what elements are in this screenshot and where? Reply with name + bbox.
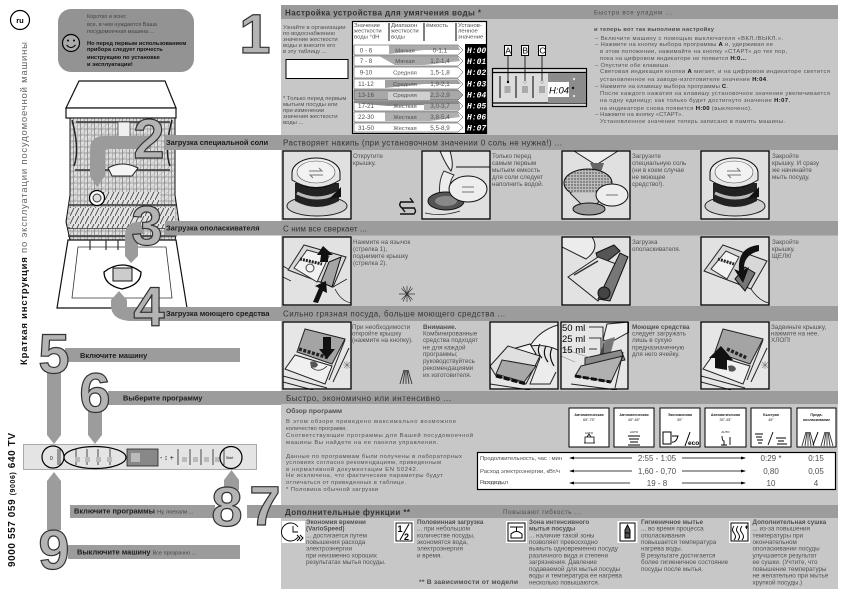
function: extra drying: ее сушки. (Учтите, что xyxy=(752,559,818,566)
salt step 2: fill with water: мытьем емкость xyxy=(492,167,541,174)
function: hygiene: В результате достигается xyxy=(641,552,715,560)
attention note on combined detergents: программы; xyxy=(423,351,458,358)
detergent step 3: dosage: следует загружать xyxy=(632,330,687,338)
program cards: 65°-75° xyxy=(583,418,596,422)
function: intensive zone: воды и температура ее нагрева xyxy=(529,572,622,580)
text block: setup instructions: пока на цифровом индикаторе не появится H:0... xyxy=(600,56,746,62)
model footnote: ** В зависимости от модели xyxy=(419,579,518,586)
program cards: Автоматическая xyxy=(574,413,604,417)
salt step 3: load salt: (ни в коем случае xyxy=(632,167,685,174)
detergent step 1: open lid: (нажмите на кнопку). xyxy=(352,337,413,344)
rinse step 1: press latch: поднимите крышку xyxy=(353,253,409,260)
water hardness table: 7 - 8 xyxy=(360,58,373,65)
water hardness table: 31-50 xyxy=(358,125,375,132)
callout: read the manual: инструкцию по установке xyxy=(87,55,160,61)
function: intensive zone: ... наличие такой зоны xyxy=(529,532,595,540)
function: hygiene xyxy=(618,519,729,573)
water hardness table: Жесткая xyxy=(393,104,417,110)
salt step 4: close lid: же начинайте xyxy=(772,166,812,174)
program data table: 0,05 xyxy=(808,467,824,476)
program overview text: условиях согласно рекомендациям, приведенным xyxy=(286,460,441,466)
program cards: Экономичная xyxy=(668,413,692,417)
step 6: select program xyxy=(79,361,281,444)
text block: find out the water hardness: значение жесткости xyxy=(283,37,338,43)
water hardness table: Мягкая xyxy=(395,59,415,65)
program data table: 2:55 - 1:05 xyxy=(638,454,677,463)
function: VarioSpeed: электроэнергии xyxy=(306,546,352,552)
callout: read the manual: посудомоечная машина ... xyxy=(87,29,155,35)
function: half load: и время. xyxy=(417,552,442,560)
function: hygiene: нагрева воды. xyxy=(641,546,683,552)
detergent step 3: dosage: 15 ml xyxy=(562,345,585,356)
attention note on combined detergents: Внимание. xyxy=(423,324,456,331)
rinse step 3: close lid: ЩЕЛК! xyxy=(772,253,792,260)
text block: setup instructions: – Нажмите на клавишу выбора программы C. xyxy=(595,84,728,90)
program cards: Быстрая xyxy=(763,413,779,417)
program data table: 0:15 xyxy=(808,454,824,463)
control panel with A B C buttons: B xyxy=(522,46,528,56)
detergent step 1: open lid: откройте крышку xyxy=(352,330,402,338)
water hardness table: 0-1,1 xyxy=(433,48,448,54)
program cards: 50° xyxy=(677,418,683,422)
section band: water softener setup xyxy=(281,5,838,19)
water hardness table: жесткости xyxy=(354,28,382,34)
text block: setup instructions: – Опустите обе клавиши. xyxy=(595,63,670,69)
salt step 2: fill with water: Только перед xyxy=(492,153,532,160)
water hardness table: 3,8-5,4 xyxy=(430,114,450,121)
rinse step 2: load rinse aid: ополаскивателя. xyxy=(632,246,681,253)
section band: salt xyxy=(281,135,838,150)
section band: water softener setup: Быстро все уладим ... xyxy=(594,10,672,16)
water hardness table: Средняя xyxy=(393,70,417,76)
water hardness table: H:07 xyxy=(467,124,486,134)
callout: read the manual: Коротко и ясно: xyxy=(87,14,127,20)
control panel with A B C buttons: A xyxy=(505,46,511,56)
text block: setup instructions: После каждого нажатия на клавишу установочное значение увеличивается xyxy=(600,91,830,97)
program overview text: * Половина обычной загрузки xyxy=(286,486,378,493)
program overview text: отличаться от приведенных в таблице. xyxy=(286,480,406,486)
function: half load xyxy=(394,519,484,560)
function: extra drying: Дополнительная сушка xyxy=(752,519,827,526)
water hardness table: 0 - 6 xyxy=(360,48,373,54)
section band: additional functions xyxy=(281,505,838,518)
water hardness table: H:00 xyxy=(467,47,486,56)
function: hygiene: посуды после мытья. xyxy=(641,566,703,573)
function: extra drying: повышение температуры xyxy=(752,566,827,573)
program cards xyxy=(569,408,836,447)
text block: setup instructions: и теперь вот так выполним настройку xyxy=(594,26,715,33)
function: extra drying: хрупкой посуды.) xyxy=(752,578,802,586)
section band: detergent: Сильно грязная посуда, больше моющего средства ... xyxy=(283,310,505,318)
label: rinse aid xyxy=(165,221,281,236)
function: half load: 1 xyxy=(398,524,403,534)
section band: water softener setup: Настройка устройства для умягчения воды * xyxy=(285,8,482,18)
text block: find out the water hardness: в эту таблицу ... xyxy=(283,49,327,55)
attention note on combined detergents: рекомендациями xyxy=(423,365,474,372)
text block: find out the water hardness: по водоснабжению xyxy=(283,31,336,37)
function: VarioSpeed: ... достигается путем xyxy=(306,532,367,540)
program overview text: количество программ. xyxy=(286,426,347,432)
program overview text: Данные по программам были получены в лабораторных xyxy=(286,454,462,460)
salt step 3: load salt: не моющее xyxy=(632,174,666,181)
program overview text xyxy=(286,407,473,493)
detergent step 4: close lid xyxy=(701,322,826,390)
section band: rinse aid: С ним все сверкает ... xyxy=(283,224,367,234)
salt step 3: load salt: средство!). xyxy=(632,181,664,188)
rinse step 1: press latch xyxy=(283,237,411,305)
function: hygiene: более гигиеничное состояние xyxy=(641,558,729,566)
text block: setup instructions: – Нажмите на кнопку «СТАРТ». xyxy=(595,112,683,118)
function: intensive zone: несколько повышаются. xyxy=(529,580,600,586)
note: first use xyxy=(283,96,346,126)
arrow: step 2 to salt xyxy=(90,136,150,206)
water hardness table: воды xyxy=(391,34,405,40)
water hardness table: Диапазон xyxy=(391,23,417,29)
section band: rinse aid xyxy=(281,221,838,236)
note: first use: мытьем посуды или xyxy=(283,102,338,108)
note: first use: * Только перед первым xyxy=(283,96,346,102)
water hardness table: ленное xyxy=(458,28,478,34)
program data table: 1,60 - 0,70 xyxy=(638,467,677,476)
water hardness table: 1,2-1,4 xyxy=(430,58,450,65)
water hardness table: H:02 xyxy=(467,69,486,78)
function: VarioSpeed: Экономия времени xyxy=(306,519,366,526)
program overview text: Не исключена, что фактические параметры будут xyxy=(286,473,443,479)
program cards: Автоматическая xyxy=(619,413,649,417)
water hardness table: жесткости xyxy=(391,28,419,34)
step 9: switch off: Выключите машину Все прозрачно ... xyxy=(77,548,197,556)
program overview text: В этом обзоре приведено максимально возможное xyxy=(286,419,457,425)
rinse step 3: close lid xyxy=(701,237,799,305)
water hardness table: 1,5-1,8 xyxy=(430,70,450,76)
rinse step 1: press latch: Нажмите на язычок xyxy=(353,239,411,246)
function: VarioSpeed: при неизменно хороших xyxy=(306,552,378,560)
water hardness table: 22-30 xyxy=(358,114,375,121)
program overview text: Обзор программ xyxy=(286,407,342,415)
text block: setup instructions: установленное на заводе-изготовителе значение H:04. xyxy=(600,77,768,83)
program cards: 45°-65° xyxy=(628,418,641,422)
function: hygiene: ополаскивания xyxy=(641,532,685,540)
water hardness table: H:04 xyxy=(467,92,486,100)
water hardness table: 2,2-2,9 xyxy=(430,92,450,99)
program data table: Продолжительность, час : мин xyxy=(480,456,562,462)
water hardness table: H:01 xyxy=(467,58,486,67)
water hardness table: Мягкая xyxy=(395,48,415,54)
rinse step 3: close lid: Закройте xyxy=(772,238,799,246)
water hardness table: Значение xyxy=(354,23,381,29)
salt step 3: load salt: Загрузите xyxy=(632,153,661,160)
badge: language ru xyxy=(10,10,30,30)
callout: read the manual: Но перед первым использованием xyxy=(87,41,186,47)
step 7 number and band: 7 xyxy=(249,474,281,537)
function: extra drying: ... из-за повышения xyxy=(752,526,810,532)
control strip: - ↕ + xyxy=(160,455,174,462)
water hardness table: H:06 xyxy=(467,114,486,122)
section band: salt: Растворяет накипь (при установочном значении 0 соль не нужна!) ... xyxy=(283,138,562,148)
step 8: start program: Включите программы Ну, поехали ... xyxy=(74,506,194,516)
program data table: 0,80 xyxy=(763,467,779,476)
step 3 number: 3 xyxy=(131,194,163,257)
text block: setup instructions: – Включите машину с помощью выключателя «ВКЛ./ВЫКЛ.». xyxy=(595,36,783,42)
salt step 3: load salt: специальную соль xyxy=(632,160,687,167)
program cards: Предв. xyxy=(810,413,823,417)
function: intensive zone: Зона интенсивного xyxy=(529,519,589,526)
vertical title: Краткая инструкция по эксплуатации посудомоечной машины xyxy=(19,42,30,365)
detergent step 3: dosage: 50 ml xyxy=(562,323,585,334)
water hardness table: Средняя xyxy=(393,93,417,99)
function: hygiene: повышается температура xyxy=(641,539,717,546)
text block: find out the water hardness: воды и внесите его xyxy=(283,43,336,49)
detergent step 3: dosage: 25 ml xyxy=(562,334,585,345)
step 2 number: 2 xyxy=(133,107,165,170)
detergent step 3: dosage xyxy=(561,322,690,390)
program data table: 19 - 8 xyxy=(647,479,668,488)
function: extra drying: ополаскивании посуды xyxy=(752,546,820,552)
text block: setup instructions xyxy=(594,26,830,125)
text block: setup instructions: Световая индикация кнопки A мигает, и на цифровом индикаторе светится xyxy=(600,69,830,75)
salt step 4: close lid: мыть посуду. xyxy=(772,174,810,181)
salt step 2: fill with water: наполнить водой. xyxy=(492,180,544,188)
program overview text: в нормативной документации EN 50242. xyxy=(286,466,418,473)
salt step 1: open lid: Открутите xyxy=(353,153,383,160)
function: extra drying: окончательном xyxy=(752,539,797,546)
text block: setup instructions: Установленное значение теперь записано в память машины. xyxy=(600,119,785,125)
water hardness table: 3,0-3,7 xyxy=(430,103,450,110)
step 5: switch on: Включите машину xyxy=(80,351,148,360)
function: intensive zone: подаваемой для мытья посуды xyxy=(529,565,621,573)
program data table: Расход электроэнергии, кВт/ч xyxy=(480,469,560,475)
control strip: 0 xyxy=(50,456,53,462)
water hardness table: 13-16 xyxy=(358,92,375,99)
water hardness table: 11-12 xyxy=(358,81,374,88)
detergent step 3: dosage: для него ячейку. xyxy=(632,350,680,358)
text block: setup instructions: на одну единицу; как только будет достигнуто значение H:07, xyxy=(600,98,790,104)
water hardness table: значение xyxy=(458,34,484,40)
water hardness table xyxy=(352,22,486,134)
rinse step 2: load rinse aid xyxy=(562,237,681,305)
salt step 4: close lid: крышку. И сразу xyxy=(772,160,820,167)
program cards: 35°-45° xyxy=(719,418,732,422)
water hardness table: Жесткая xyxy=(393,126,417,132)
right panel background xyxy=(281,5,838,589)
step 9: switch off xyxy=(38,472,240,581)
function: half load: 2 xyxy=(404,532,409,542)
attention note on combined detergents: руководствуйтесь xyxy=(423,357,476,365)
section band: additional functions: Повышают гибкость ... xyxy=(503,508,581,516)
water hardness table: 9-10 xyxy=(360,70,373,76)
function: half load: электроэнергия xyxy=(417,546,463,552)
water hardness table: Жесткая xyxy=(393,115,417,121)
rinse step 1: press latch: (стрелка 1), xyxy=(353,246,387,253)
program data table: 4 xyxy=(814,479,819,488)
attention note on combined detergents: Комбинированные xyxy=(423,330,478,338)
program cards: AUTO xyxy=(721,430,730,434)
detergent step 1: open lid: При необходимости xyxy=(352,323,411,331)
label: salt: Загрузка специальной соли xyxy=(166,138,269,147)
program data table: 0:29 * xyxy=(761,454,781,463)
step 5: switch on xyxy=(38,322,240,444)
note: first use: воды ... xyxy=(283,120,304,126)
water hardness table: ёмкость xyxy=(426,23,448,29)
text block: setup instructions: в этом положении, нажимайте на кнопку «СТАРТ» до тех пор, xyxy=(600,48,787,55)
control panel with A B C buttons: H:04 xyxy=(549,86,569,96)
callout: read the manual: прибора следует прочесть xyxy=(87,46,163,53)
function: intensive zone xyxy=(506,519,622,586)
function: half load: Половинная загрузка xyxy=(417,519,484,526)
step 4 number: 4 xyxy=(133,275,165,338)
arrow: step 4 to detergent xyxy=(111,291,281,321)
text block: setup instructions: на индикаторе снова появится H:00 (выключено). xyxy=(600,106,752,112)
salt step 3: load salt xyxy=(562,151,687,219)
function: VarioSpeed xyxy=(282,519,386,566)
attention note on combined detergents xyxy=(423,324,478,379)
water hardness table: воды °dH xyxy=(354,34,379,40)
detergent step 1: open lid xyxy=(283,322,413,390)
label: salt xyxy=(165,135,281,150)
function: extra drying: не желательно при мытье xyxy=(752,572,829,580)
attention note on combined detergents: средства подходят xyxy=(423,337,478,344)
badge: language ru: ru xyxy=(16,16,24,25)
function: intensive zone: вымыть одновременно посуду xyxy=(529,546,619,552)
attention note on combined detergents: не для каждой xyxy=(423,344,466,352)
step 6: select program: 6 xyxy=(79,361,111,424)
program data table: 10 xyxy=(767,479,776,488)
note: first use: при изменении xyxy=(283,108,324,114)
section band: programs: Быстро, экономично или интенсивно ... xyxy=(286,394,451,403)
detergent step 3: dosage: Моющие средства xyxy=(632,324,690,331)
control strip: Start xyxy=(226,456,233,460)
dishwasher illustration xyxy=(57,81,187,308)
program cards: Автоматическая xyxy=(711,413,740,417)
function: extra drying: улучшается результат xyxy=(752,552,817,560)
salt step 2: fill with water: самым первым xyxy=(492,160,536,167)
detergent step 2: tablet xyxy=(490,322,558,390)
icon: salt symbol xyxy=(400,198,416,214)
water hardness table: 1,9-2,1 xyxy=(430,81,450,88)
program data table xyxy=(478,452,836,490)
rinse step 3: close lid: крышку. xyxy=(772,246,795,253)
step 9: switch off: 9 xyxy=(38,518,70,581)
attention note on combined detergents: их изготовителя. xyxy=(423,372,472,379)
vertical code: 9000 557 059 (9006) 640 TV xyxy=(7,433,18,567)
water hardness table: Средняя xyxy=(393,82,417,88)
water hardness table: Установ- xyxy=(458,23,482,29)
label: rinse aid: Загрузка ополаскивателя xyxy=(166,224,260,232)
detergent step 4: close lid: Задвиньте крышку, xyxy=(771,324,826,331)
detergent step 3: dosage: лишь в сухую xyxy=(632,337,672,344)
program cards: AUTO xyxy=(585,431,594,435)
water hardness table: 5,5-8,9 xyxy=(430,125,450,132)
function: intensive zone: позволяет превосходно xyxy=(529,539,598,546)
section band: programs xyxy=(281,391,838,404)
function: VarioSpeed: повышения расхода xyxy=(306,539,366,546)
function: hygiene: ... во время процесса xyxy=(641,526,704,532)
rinse step 1: press latch: (стрелка 2). xyxy=(353,260,387,267)
control strip xyxy=(24,444,256,470)
white note box xyxy=(286,60,348,78)
program cards: AUTO xyxy=(630,430,639,434)
salt step 1: open lid xyxy=(283,151,383,219)
icon: detergent symbol xyxy=(400,370,412,384)
function: half load: количестве посуды, xyxy=(417,532,475,540)
section band: additional functions: Дополнительные функции ** xyxy=(285,508,411,517)
detergent step 4: close lid: ХЛОП! xyxy=(771,337,791,344)
function: intensive zone: различного вида и степени xyxy=(529,552,609,560)
note: first use: значения жесткости xyxy=(283,114,338,120)
function: half load: ... при небольшом xyxy=(417,524,470,532)
step 8: start program: 8 xyxy=(211,475,243,538)
water hardness table: H:05 xyxy=(467,102,486,112)
salt step 4: close lid xyxy=(701,151,820,219)
program cards: 45° xyxy=(768,418,774,422)
text block: find out the water hardness: Узнайте в организации xyxy=(283,24,346,31)
callout: read the manual: и эксплуатации! xyxy=(87,62,133,68)
salt step 2: fill with water: для соли следует xyxy=(492,174,543,181)
water hardness table: 17-21 xyxy=(358,103,375,110)
control panel with A B C buttons: C xyxy=(539,46,546,56)
salt step 2: fill with water xyxy=(422,151,544,219)
arrow: step 3 to rinse aid xyxy=(104,222,145,289)
function: VarioSpeed: результатах мытья посуды. xyxy=(306,559,386,566)
callout: read the manual xyxy=(58,9,194,72)
program data table: Расход воды, л xyxy=(480,480,509,486)
program cards: eco xyxy=(688,440,699,447)
step 6: select program: Выберите программу xyxy=(123,394,203,402)
text block: setup instructions: – Нажмите на кнопку выбора программы A и, удерживая ее xyxy=(595,42,774,48)
detergent step 4: close lid: нажмите на нее. xyxy=(771,330,819,338)
program overview text: машины Вы найдете на ее панели управления. xyxy=(286,439,438,446)
detergent step 3: dosage: предназначенную xyxy=(632,344,684,352)
function: intensive zone: мытья посуды xyxy=(529,526,575,532)
salt step 1: open lid: крышку. xyxy=(353,160,376,167)
function: extra drying: температуры при xyxy=(752,532,804,540)
function: hygiene: Гигиеничное мытье xyxy=(641,519,704,526)
program cards: ополаскивание xyxy=(803,418,830,422)
section band: detergent xyxy=(281,306,838,321)
step 1 number: 1 xyxy=(239,2,271,65)
program overview text: Соответствующие программы для Вашей посудомоечной xyxy=(286,432,473,439)
rinse step 2: load rinse aid: Загрузка xyxy=(632,239,658,246)
step 8: start program xyxy=(70,470,243,538)
salt step 4: close lid: Закройте xyxy=(772,152,799,160)
function: extra drying xyxy=(729,519,829,586)
step 5: switch on: 5 xyxy=(38,322,70,385)
water hardness table: H:03 xyxy=(467,80,486,90)
function: half load: экономятся вода, xyxy=(417,539,468,546)
callout: read the manual: все, в чем нуждается Ваша xyxy=(87,22,158,28)
icon: rinse aid star xyxy=(399,286,415,302)
label: detergent: Загрузка моющего средства xyxy=(166,309,270,318)
function: intensive zone: загрязнения. Давление xyxy=(529,559,597,566)
text block: find out the water hardness xyxy=(283,24,346,55)
control panel with A B C buttons xyxy=(492,46,586,106)
function: VarioSpeed: (VarioSpeed) xyxy=(306,526,344,532)
